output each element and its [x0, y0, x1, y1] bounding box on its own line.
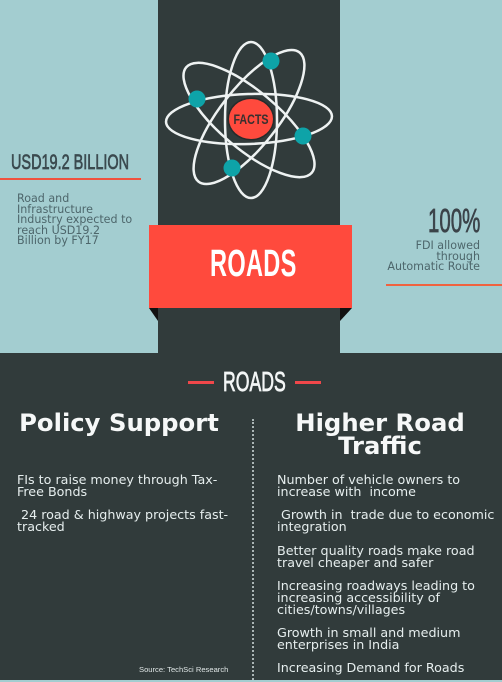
- heading: Policy Support: [19, 408, 219, 437]
- bullet text: Increasing Demand for Roads: [277, 660, 464, 675]
- banner title: ROADS: [210, 243, 297, 285]
- bullet text: FIs to raise money through Tax-: [17, 472, 217, 487]
- bullet text: 24 road & highway projects fast-: [21, 507, 228, 522]
- bullet text: [17, 507, 228, 534]
- stat description: Billion by FY17: [17, 234, 99, 247]
- bullet text: tracked: [17, 519, 65, 534]
- bullet text: [277, 472, 460, 499]
- icon: atom with facts badge: FACTS: [234, 111, 268, 127]
- source note: Source: TechSci Research: [139, 665, 228, 674]
- bullet text: [277, 578, 475, 617]
- bullet text: increasing accessibility of: [277, 590, 440, 605]
- bullet text: Better quality roads make road: [277, 543, 475, 558]
- bullet text: [277, 543, 475, 570]
- stat description: through: [436, 250, 480, 263]
- bullet text: travel cheaper and safer: [277, 555, 433, 570]
- stat description: reach USD19.2: [17, 224, 100, 237]
- stat: 100% FDI: [386, 202, 502, 286]
- stat: USD19.2 Billion: [0, 151, 141, 247]
- dark center column: [158, 0, 340, 354]
- bullet text: Growth in small and medium: [277, 625, 460, 640]
- red rule: [0, 178, 141, 180]
- bullet text: Number of vehicle owners to: [277, 472, 460, 487]
- column: higher road traffic: [277, 408, 494, 675]
- heading: [295, 408, 465, 460]
- stat description: Industry expected to: [17, 213, 132, 226]
- stat description: FDI allowed: [416, 239, 480, 252]
- icon: banner fold shadows: [149, 308, 352, 321]
- right dash: [295, 381, 321, 384]
- bullet text: cities/towns/villages: [277, 602, 405, 617]
- heading: Higher Road: [295, 408, 465, 437]
- stat description: [17, 192, 132, 247]
- stat value: 100%: [428, 202, 480, 239]
- bullet text: enterprises in India: [277, 637, 399, 652]
- red banner: roads: [149, 225, 352, 308]
- dark lower panel: [0, 353, 502, 680]
- stat description: [387, 239, 480, 273]
- bullet text: [277, 625, 460, 652]
- red rule: [386, 284, 502, 286]
- bullet text: integration: [277, 519, 347, 534]
- divider: [252, 419, 254, 680]
- bullet text: increase with income: [277, 484, 416, 499]
- heading: Traffic: [338, 431, 422, 460]
- bullet text: [17, 472, 217, 499]
- stat description: Automatic Route: [387, 260, 480, 273]
- stat description: Infrastructure: [17, 203, 93, 216]
- left dash: [188, 381, 214, 384]
- stat description: Road and: [17, 192, 69, 205]
- heading text: ROADS: [223, 366, 286, 397]
- stat value: USD19.2 BILLION: [11, 151, 129, 174]
- column: policy support: [17, 408, 228, 674]
- bullet text: Free Bonds: [17, 484, 87, 499]
- icon: atom with facts badge: [164, 40, 334, 200]
- bullet text: [277, 507, 494, 534]
- bullet text: Increasing roadways leading to: [277, 578, 475, 593]
- bullet text: Growth in trade due to economic: [281, 507, 494, 522]
